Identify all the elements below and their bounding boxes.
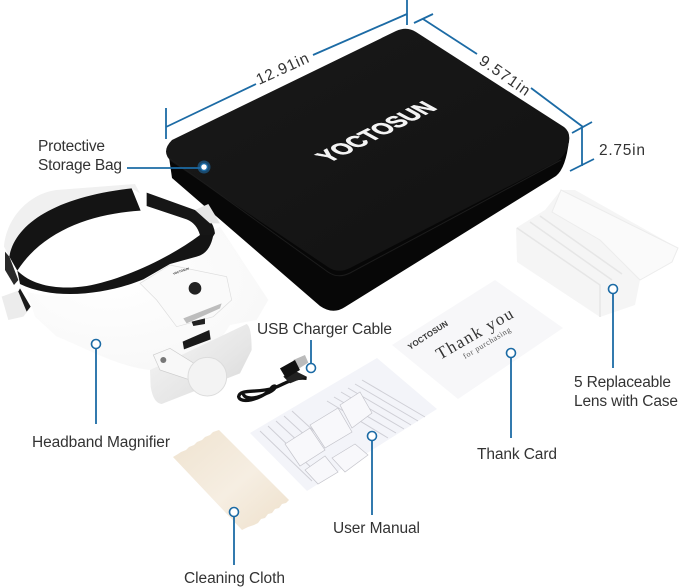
headband back strap	[9, 188, 141, 271]
headband right strap	[147, 193, 215, 252]
5 replaceable lens case	[516, 190, 678, 317]
callout: thank card	[477, 348, 557, 463]
callout: replaceable lens: Lens with Case	[574, 393, 678, 410]
label: protective storage bag: Storage Bag	[38, 157, 122, 174]
callout: headband magnifier: Headband Magnifier	[32, 434, 170, 451]
dimension: length 12.91in: 12.91in	[254, 50, 312, 89]
thank you card: YOCTOSUN	[406, 319, 450, 352]
callout: USB charger cable	[257, 321, 392, 372]
storage bag	[166, 29, 569, 311]
dimension: width 9.571in: 9.571in	[476, 52, 533, 100]
dimension: height 2.75in	[570, 127, 645, 171]
callout: USB charger cable: USB Charger Cable	[257, 321, 392, 338]
headband magnifier	[2, 184, 268, 404]
callout: replaceable lens: 5 Replaceable	[574, 374, 671, 391]
dimension: width 9.571in	[414, 14, 592, 133]
dimension: height 2.75in: 2.75in	[599, 142, 645, 159]
headband rim	[4, 184, 140, 257]
magnifier lens	[150, 324, 252, 404]
visor body	[27, 227, 268, 370]
callout: cleaning cloth: Cleaning Cloth	[184, 570, 285, 587]
headband magnifier: YOCTOSUN	[172, 266, 190, 276]
label: protective storage bag	[38, 138, 210, 174]
USB charger cable	[239, 355, 308, 400]
LED module	[140, 265, 232, 327]
thank you card: Thank you	[432, 304, 517, 363]
adjustment knobs	[2, 290, 30, 320]
callout: replaceable lens	[574, 284, 678, 410]
headband front strap	[17, 235, 213, 294]
cleaning cloth	[173, 430, 289, 530]
thank you card	[392, 280, 563, 399]
callout: user manual: User Manual	[333, 520, 420, 537]
callout: headband magnifier	[32, 340, 170, 451]
user manual	[250, 358, 437, 491]
thank you card: for purchasing	[461, 325, 512, 361]
brand logo on bag: YOCTOSUN	[310, 98, 443, 166]
label: protective storage bag: Protective	[38, 138, 105, 155]
dimension: length 12.91in	[166, 0, 407, 139]
callout: thank card: Thank Card	[477, 446, 557, 463]
callout: user manual	[333, 432, 420, 537]
callout: cleaning cloth	[184, 508, 285, 587]
